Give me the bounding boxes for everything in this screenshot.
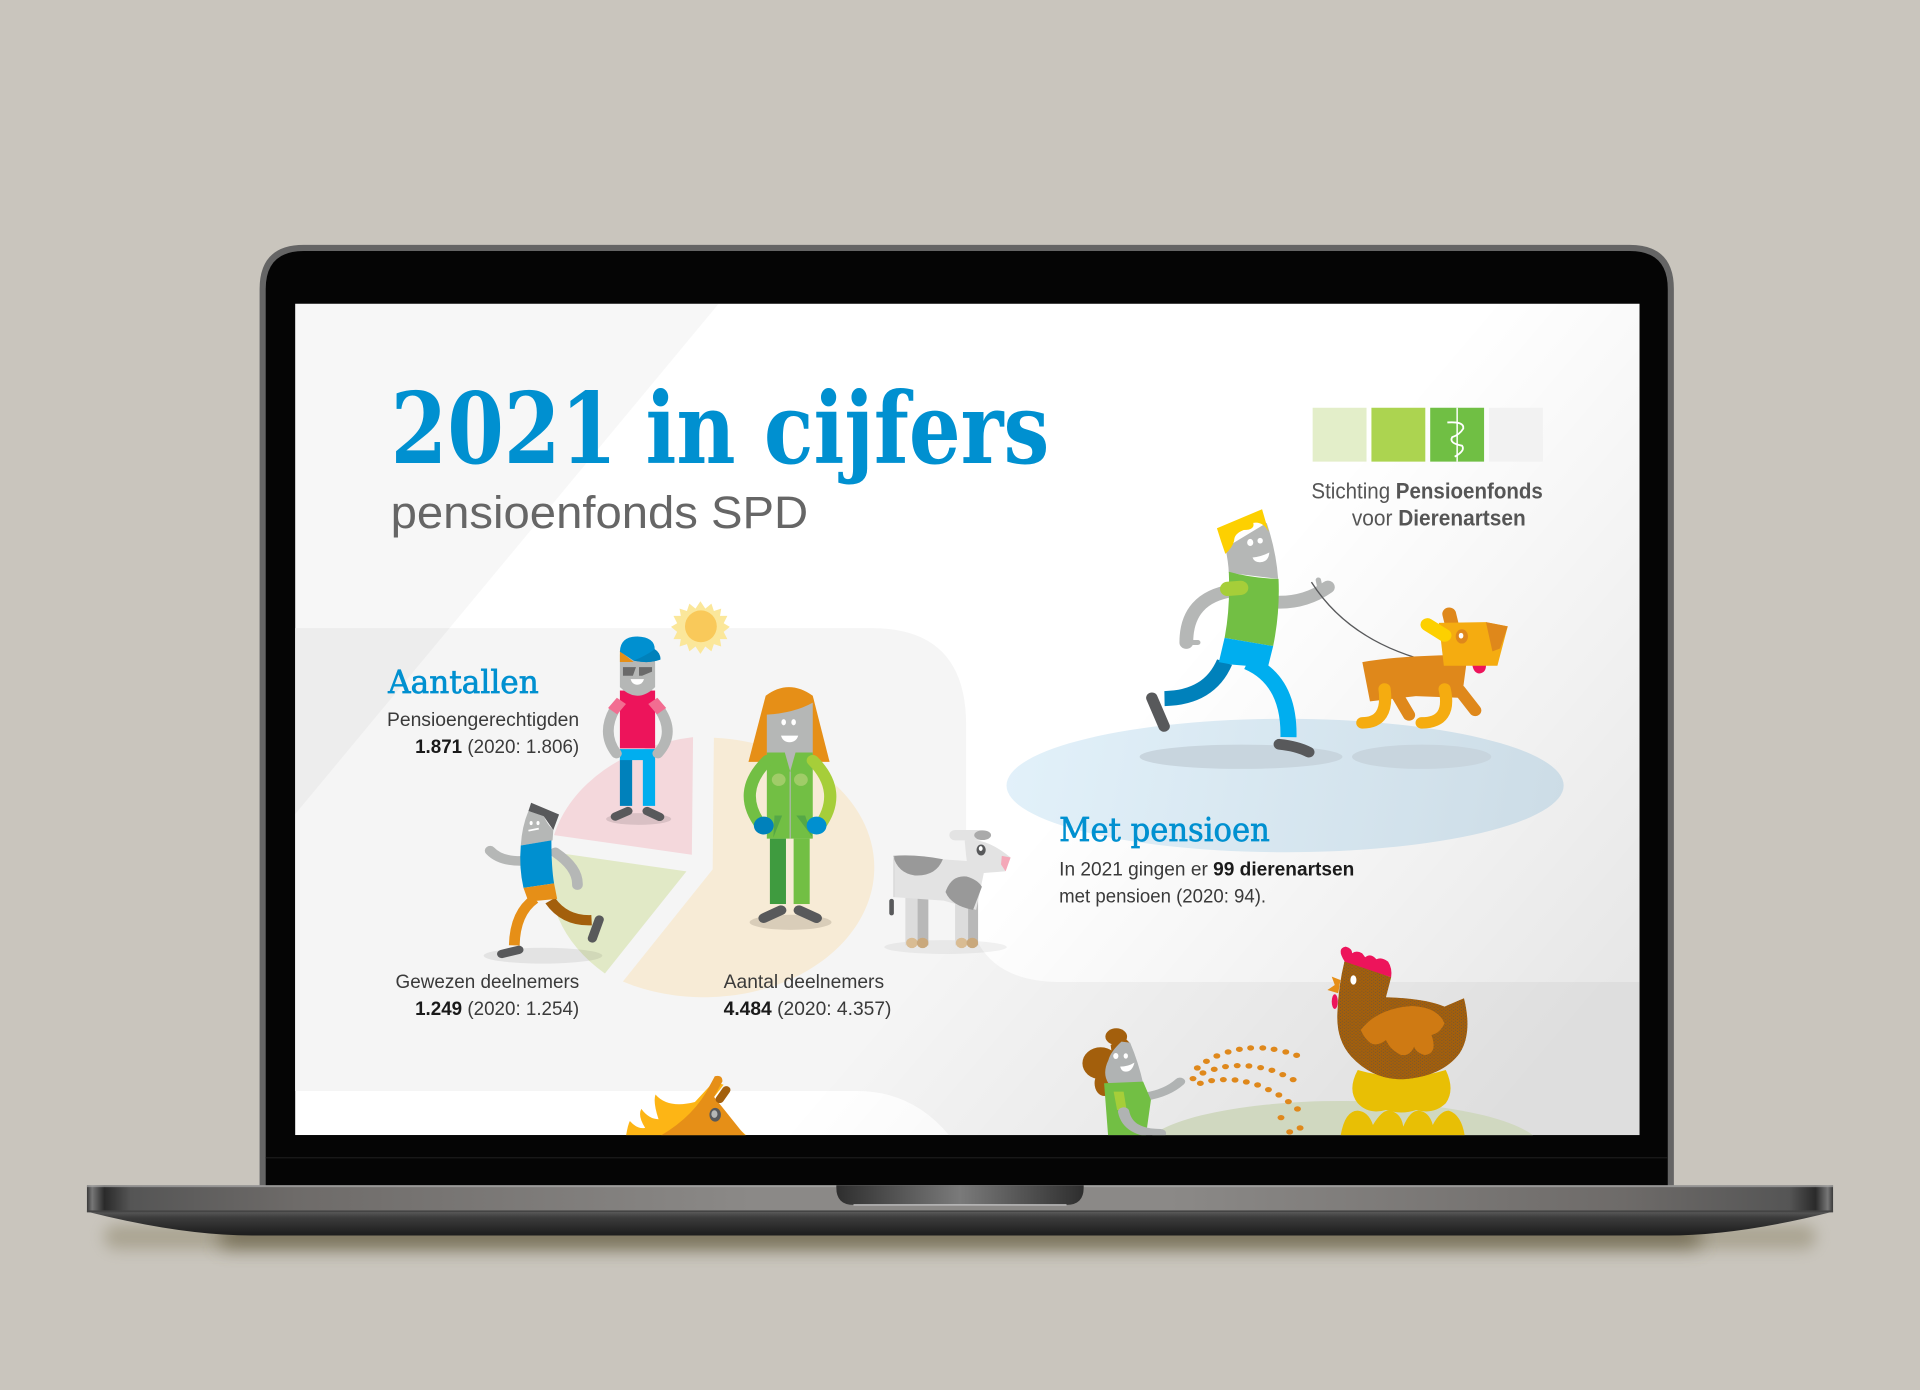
value: Gewezen deelnemers: 1.249 (2020: 1.254) (415, 998, 579, 1020)
figure: running man (484, 803, 602, 964)
illustration: woman feeding chicken (1082, 946, 1533, 1136)
leash (1311, 582, 1414, 657)
diagonal light band (295, 304, 719, 814)
logo: Stichting Pensioenfonds voor Dierenartsen: voor Dierenartsen (1352, 505, 1526, 530)
logo: Stichting Pensioenfonds voor Dierenartsen: Stichting Pensioenfonds (1311, 478, 1543, 503)
label: Aantal deelnemers: Aantal deelnemers (724, 971, 884, 993)
value: Aantal deelnemers: 4.484 (2020: 4.357) (724, 998, 891, 1020)
blue ground ellipse (1007, 719, 1564, 852)
laptop base (87, 1185, 1833, 1236)
icon: eggs (1340, 1070, 1465, 1137)
group of figures drawn on the pie (484, 636, 1011, 964)
icon: sun (671, 601, 730, 654)
screen (295, 304, 1640, 1199)
logo: Stichting Pensioenfonds voor Dierenartsen (1311, 408, 1543, 530)
laptop mockup with infographic (86, 244, 1834, 1262)
ground ellipse (1152, 1101, 1533, 1136)
icon: hen (1327, 947, 1467, 1079)
label: Gewezen deelnemers: Gewezen deelnemers (396, 971, 579, 993)
figure: woman throwing seed (1082, 1028, 1180, 1140)
icon: dog (1362, 614, 1508, 723)
section: Aantallen heading: Aantallen (387, 663, 539, 701)
gradient sheen (1038, 418, 1640, 1135)
value: Pensioengerechtigden: 1.871 (2020: 1.806) (415, 736, 579, 758)
illustration: man walking dog (1140, 509, 1508, 769)
panel: light section background (295, 628, 1640, 1135)
title: 2021 in cijfers (391, 372, 1049, 487)
figure: walking man (1152, 509, 1328, 752)
ground shadows (1140, 745, 1491, 769)
text: retirement line 2: met pensioen (2020: 94). (1059, 885, 1266, 907)
figure: woman in green jacket (748, 687, 832, 930)
pie chart (550, 737, 874, 997)
subtitle: pensioenfonds SPD (391, 487, 808, 538)
laptop lid (260, 245, 1674, 1185)
shadow under laptop (104, 1224, 1816, 1249)
label: Pensioengerechtigden: Pensioengerechtigden (387, 709, 579, 731)
icon: rod of Asclepius (1447, 408, 1463, 462)
icon: cow (884, 830, 1011, 954)
figure: man with cap (606, 636, 671, 825)
section: Met pensioen heading: Met pensioen (1059, 810, 1270, 849)
text: retirement line 1: In 2021 gingen er 99 dierenartsen (1059, 859, 1354, 881)
illustration: partially visible chicken head (626, 1076, 748, 1140)
seed dots (1190, 1045, 1304, 1135)
